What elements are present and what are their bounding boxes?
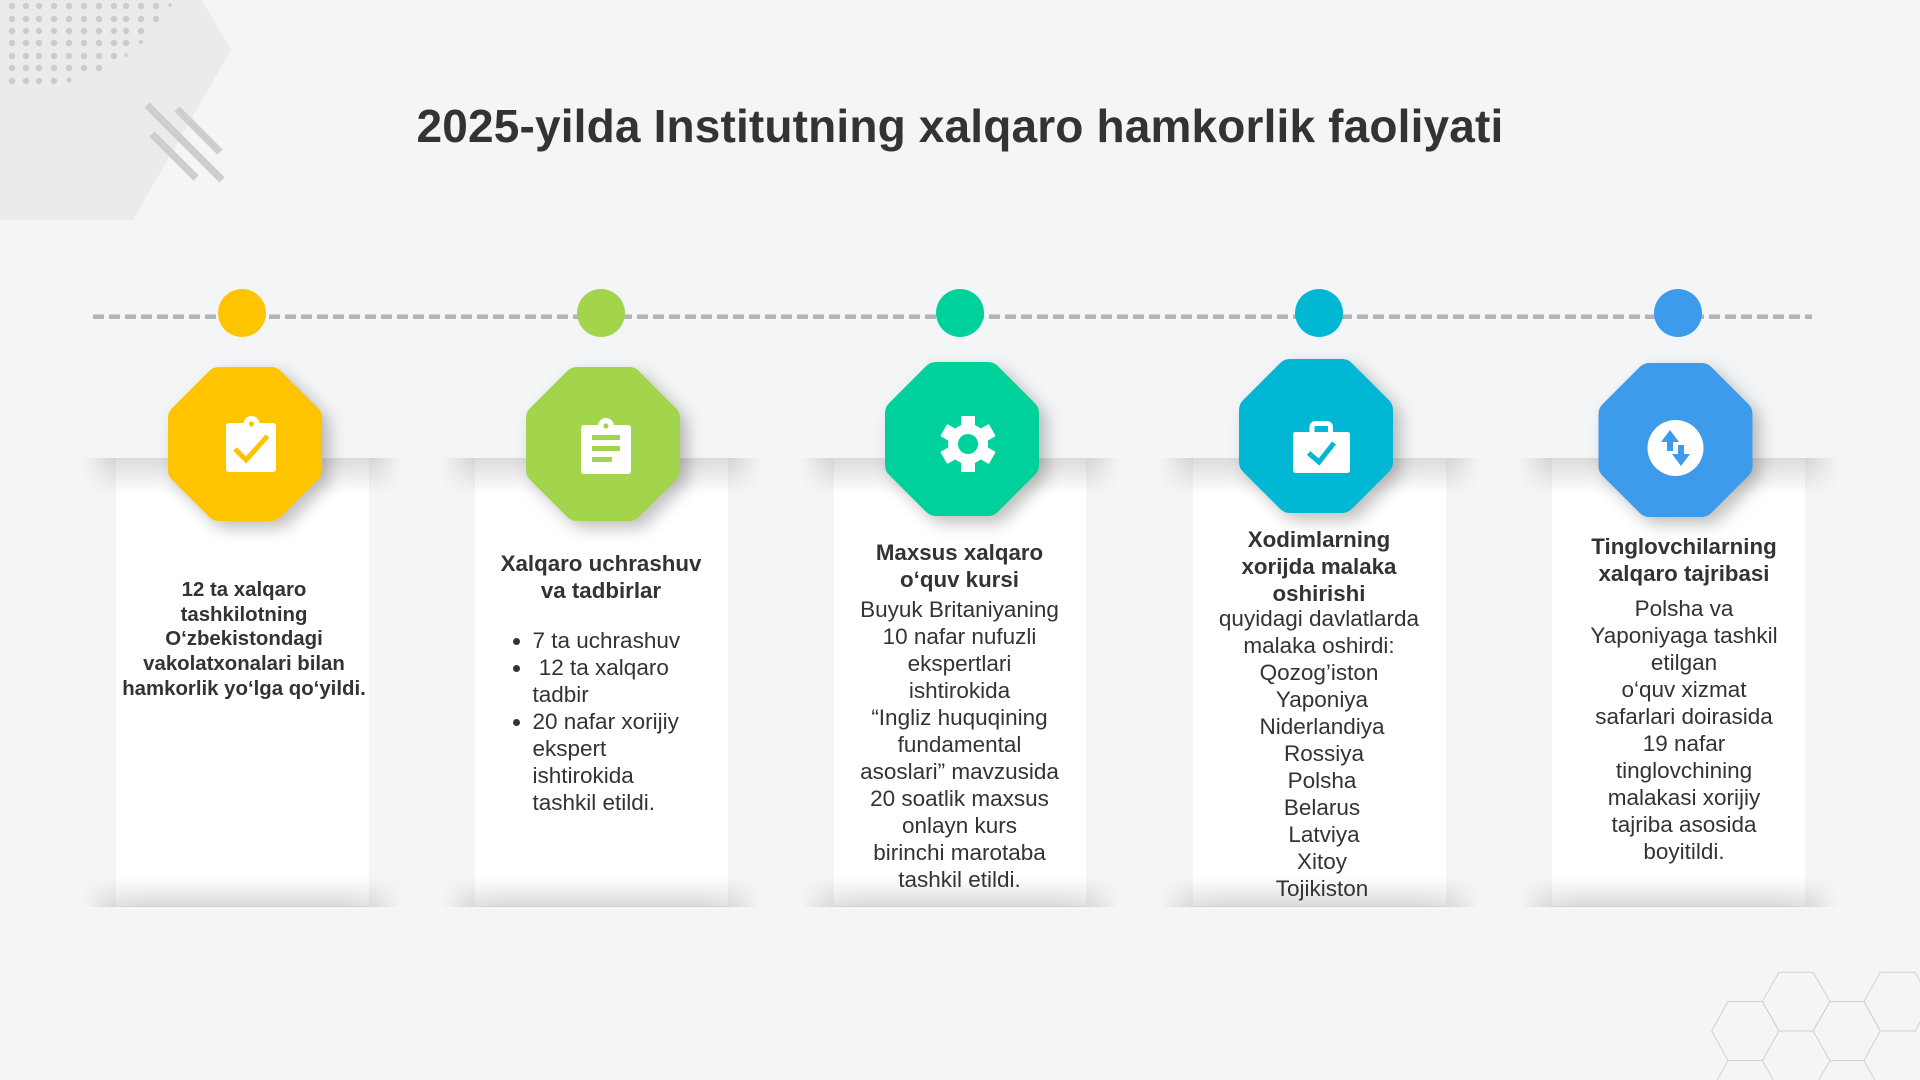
text: card 5 body: malakasi xorijiy [1608,785,1760,810]
text: card 4 body: Niderlandiya [1259,714,1385,739]
panel: card 3 special course [834,458,1086,906]
text: card 1 statement [122,579,366,700]
heading: card 5: Tinglovchilarning [1591,534,1777,559]
text: card 3 body: onlayn kurs [902,813,1017,838]
text: card 3 body: 10 nafar nufuzli [883,624,1036,649]
text: card 5 body [1590,596,1778,864]
list: card 2 bullets: tadbir [532,682,589,707]
text: card 1 statement: O‘zbekistondagi [165,628,323,650]
text: card 4 body: Qozog’iston [1260,660,1378,685]
text: card 5 body: safarlari doirasida [1595,704,1773,729]
text: card 4 body [1219,606,1419,901]
text: card 3 body: tashkil etildi. [898,867,1021,892]
text: card 3 body: “Ingliz huquqining [871,705,1048,730]
timeline dashed line [93,314,1812,319]
panel: card 1 partnerships [116,458,368,906]
text: card 4 body: malaka oshirdi: [1243,633,1395,658]
heading: card 3: Maxsus xalqaro [876,540,1043,565]
panel: card 5 learners experience [1552,458,1804,906]
text: card 1 statement: tashkilotning [181,604,307,626]
text: card 5 body: 19 nafar [1643,731,1725,756]
text: card 1 statement: hamkorlik yo‘lga qo‘yildi. [122,678,366,700]
text: card 5 body: tinglovchining [1616,758,1752,783]
text: card 4 body: Latviya [1288,822,1360,847]
heading: card 4 [1242,527,1397,606]
text: card 4 body: Polsha [1288,768,1356,793]
text: card 5 body: boyitildi. [1643,839,1725,864]
heading: card 5 [1591,534,1777,586]
text: card 3 body: 20 soatlik maxsus [870,786,1049,811]
text: card 4 body: Belarus [1284,795,1360,820]
list: card 2 bullets: tashkil etildi. [532,790,655,815]
text: card 3 body: ekspertlari [908,651,1011,676]
text: card 3 body: fundamental [898,732,1021,757]
list: card 2 bullets: ekspert [532,736,606,761]
text: card 5 body: Yaponiyaga tashkil [1590,623,1778,648]
heading: card 4: Xodimlarning [1248,527,1390,552]
text: card 5 body: tajriba asosida [1611,812,1757,837]
list: card 2 bullets: 20 nafar xorijiy [532,709,679,734]
text: card 1 statement: vakolatxonalari bilan [143,653,345,675]
panel: card 2 meetings [475,458,728,906]
text: card 5 body: etilgan [1651,650,1717,675]
heading: card 3: o‘quv kursi [900,567,1019,592]
heading: card 2: Xalqaro uchrashuv [501,551,701,576]
heading: card 2 [500,551,702,603]
text: card 3 body: birinchi marotaba [873,840,1046,865]
text: card 5 body: Polsha va [1635,596,1733,621]
heading: card 2: va tadbirlar [541,578,661,603]
timeline dot 5 [1654,289,1702,337]
text: card 3 body [860,597,1059,892]
heading: card 4: oshirishi [1273,581,1365,606]
text: card 4 body: Tojikiston [1276,876,1368,901]
decorative honeycomb [1711,972,1920,1080]
list: card 2 bullets: ishtirokida [532,763,634,788]
timeline dot 2 [577,289,625,337]
panel: card 4 staff training [1193,458,1446,906]
text: card 4 body: Xitoy [1297,849,1347,874]
heading: card 5: xalqaro tajribasi [1598,561,1770,586]
text: card 3 body: Buyuk Britaniyaning [860,597,1059,622]
title: 2025-yilda Institutning xalqaro hamkorlik faoliyati [417,100,1503,152]
heading: card 4: xorijda malaka [1242,554,1396,579]
text: card 3 body: ishtirokida [909,678,1010,703]
text: card 1 statement: 12 ta xalqaro [182,579,306,601]
text: card 5 body: o‘quv xizmat [1621,677,1747,702]
text: card 4 body: quyidagi davlatlarda [1219,606,1419,631]
decorative hexagon with dot grid and stripes [0,0,230,220]
text: card 4 body: Yaponiya [1276,687,1368,712]
list: card 2 bullets: 12 ta xalqaro [539,655,669,680]
heading: card 3 [876,540,1043,592]
list: card 2 bullets [513,628,680,815]
timeline dot 1 [218,289,266,337]
timeline dot 3 [936,289,984,337]
list: card 2 bullets: 7 ta uchrashuv [532,628,680,653]
text: card 3 body: asoslari” mavzusida [860,759,1059,784]
timeline dot 4 [1295,289,1343,337]
text: card 4 body: Rossiya [1284,741,1364,766]
